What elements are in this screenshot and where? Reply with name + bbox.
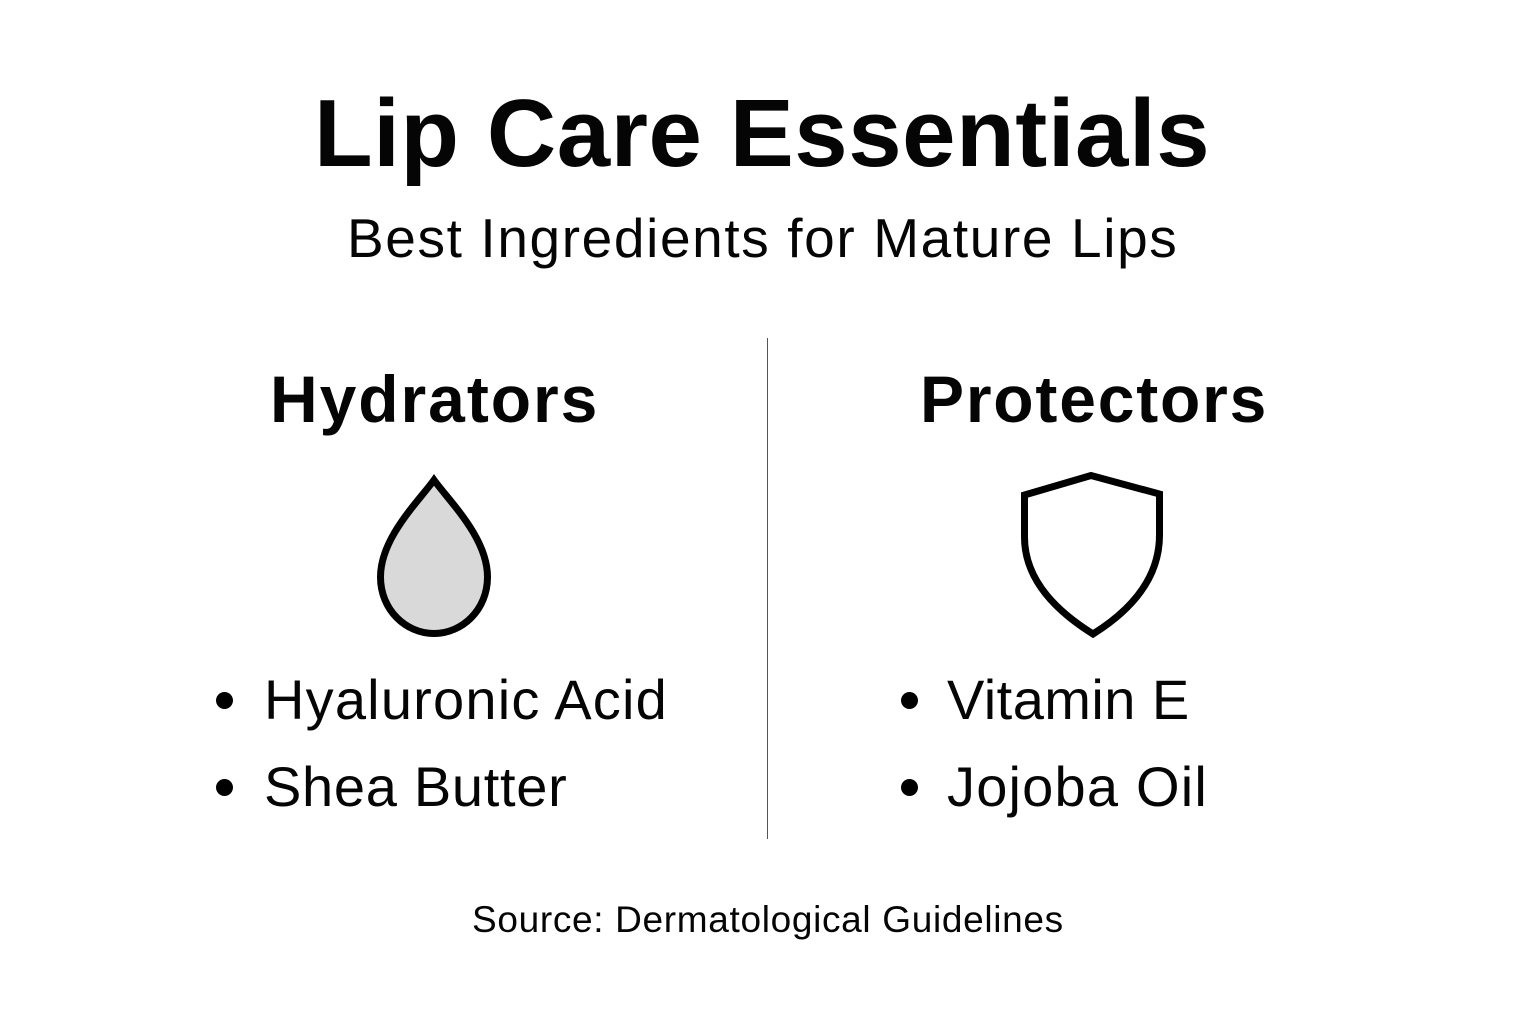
panel: protectors: [901, 362, 1268, 818]
heading: hydrators: Hydrators: [270, 362, 599, 436]
source note: Source: Dermatological Guidelines: [472, 899, 1064, 940]
title: Lip Care Essentials: [314, 80, 1210, 187]
list item: jojoba oil: Jojoba Oil: [947, 755, 1208, 818]
list item: vitamin e: Vitamin E: [947, 668, 1190, 731]
subtitle: Best Ingredients for Mature Lips: [347, 207, 1178, 269]
icon: water drop: [377, 474, 491, 637]
ingredient list: hydrators: [216, 668, 668, 818]
list item: shea butter: Shea Butter: [264, 755, 567, 818]
icon: shield: [1021, 472, 1163, 638]
heading: protectors: Protectors: [920, 362, 1268, 436]
list item: hyaluronic acid: Hyaluronic Acid: [264, 668, 668, 731]
center divider: [767, 338, 768, 839]
panel: hydrators: [216, 362, 668, 818]
ingredient list: protectors: [901, 668, 1208, 818]
